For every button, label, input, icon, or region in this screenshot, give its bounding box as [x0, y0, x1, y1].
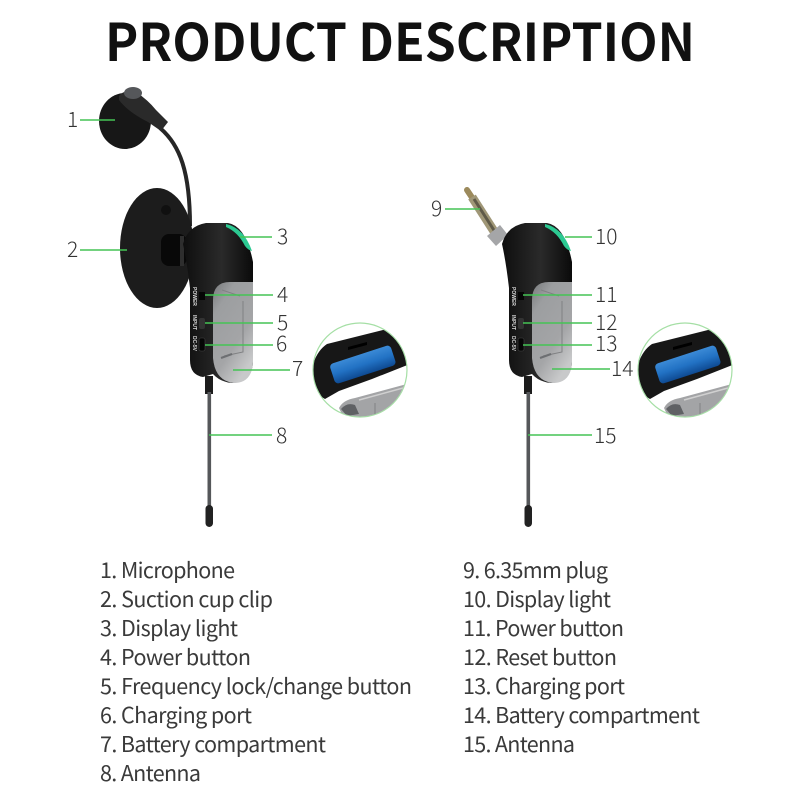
battery inset right — [636, 323, 742, 425]
parts list: left column: 1. Microphone — [100, 554, 235, 585]
callout numbers: 15 — [594, 420, 616, 450]
icon: microphone foam — [99, 93, 151, 149]
parts list: right column: 12. Reset button — [463, 641, 617, 672]
parts list: right column: 11. Power button — [463, 612, 624, 643]
parts list: right column: 9. 6.35mm plug — [463, 554, 608, 585]
callout numbers: 4 — [277, 279, 288, 309]
icon: gooseneck — [160, 128, 190, 226]
parts list: left column: 3. Display light — [100, 612, 238, 643]
callout numbers: 12 — [595, 307, 617, 337]
icon: microphone clip — [119, 87, 168, 131]
left product: wireless microphone transmitter — [99, 87, 253, 527]
callout numbers — [67, 104, 303, 450]
callout numbers: 9 — [431, 193, 442, 223]
callout numbers: 10 — [595, 221, 617, 251]
callout numbers: 8 — [276, 420, 287, 450]
callout numbers: 7 — [292, 353, 303, 383]
parts list: right column: 13. Charging port — [463, 670, 625, 701]
leader lines — [445, 209, 610, 435]
parts list: right column: 15. Antenna — [463, 728, 575, 759]
callout numbers: 13 — [595, 328, 617, 358]
parts list: left column — [100, 554, 412, 788]
title: PRODUCT DESCRIPTION — [105, 1, 695, 76]
callout numbers: 1 — [67, 104, 78, 134]
callout numbers: 6 — [276, 328, 287, 358]
callout numbers: 5 — [277, 307, 288, 337]
parts list: right column — [463, 554, 700, 759]
callout numbers: 14 — [611, 353, 633, 383]
left callouts — [67, 104, 303, 450]
device body — [502, 223, 572, 527]
icon: suction cup — [120, 188, 194, 308]
callout numbers: 11 — [595, 279, 617, 309]
battery inset left — [311, 323, 417, 425]
parts list: left column: 5. Frequency lock/change button — [100, 670, 412, 701]
parts list: right column: 14. Battery compartment — [463, 699, 700, 730]
leader lines — [80, 120, 290, 435]
icon: 6.35mm plug — [467, 190, 508, 246]
callout numbers: 3 — [277, 221, 288, 251]
parts list: left column: 7. Battery compartment — [100, 728, 326, 759]
parts list: right column: 10. Display light — [463, 583, 611, 614]
parts list: left column: 8. Antenna — [100, 757, 201, 788]
callout numbers: 2 — [67, 234, 78, 264]
parts list: left column: 2. Suction cup clip — [100, 583, 273, 614]
parts list: left column: 6. Charging port — [100, 699, 252, 730]
right product: plug transmitter — [467, 190, 572, 527]
device body — [183, 223, 253, 527]
callout numbers — [431, 193, 633, 450]
parts list: left column: 4. Power button — [100, 641, 251, 672]
right callouts — [431, 193, 633, 450]
